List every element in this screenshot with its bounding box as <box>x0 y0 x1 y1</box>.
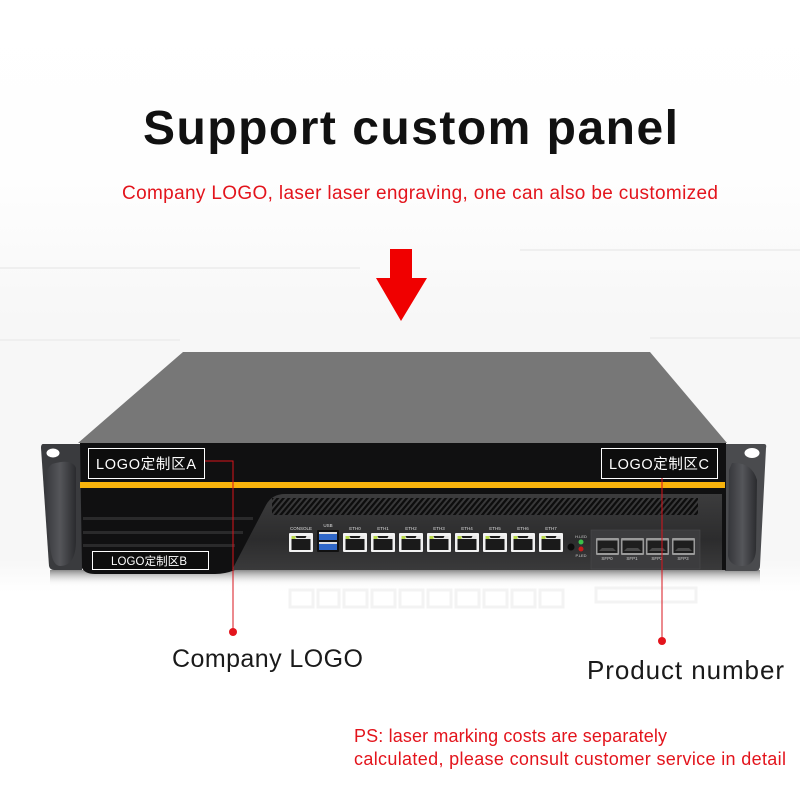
arrow: pointing down <box>376 249 427 321</box>
ventilation slots <box>272 498 698 515</box>
ethernet ports: ETH4 <box>461 526 473 531</box>
label: product number: Product number <box>587 655 784 685</box>
left rack ear <box>41 444 82 570</box>
panel grooves <box>83 517 253 547</box>
note: laser marking costs <box>354 726 786 769</box>
ethernet ports: ETH2 <box>405 526 417 531</box>
sfp cage panel: SFP1 <box>626 556 638 561</box>
server shadow <box>50 570 760 586</box>
console port: CONSOLE <box>290 526 312 531</box>
sfp cage panel: SFP2 <box>651 556 663 561</box>
server reflection <box>290 588 696 607</box>
sfp cage panel <box>591 530 700 569</box>
usb ports <box>317 523 339 552</box>
sfp cage panel: SFP3 <box>677 556 689 561</box>
label: company logo: Company LOGO <box>172 645 363 673</box>
callout line: company logo <box>205 461 237 636</box>
ethernet ports: ETH1 <box>377 526 389 531</box>
server top cover <box>78 352 727 443</box>
label box: LOGO zone B <box>92 552 208 570</box>
title: Support custom panel <box>143 102 678 155</box>
callout line: product number <box>658 478 666 645</box>
note: laser marking costs: calculated, please consult customer service in detail <box>354 749 786 769</box>
front panel <box>80 443 726 574</box>
yellow stripe <box>80 482 725 488</box>
sfp cage panel: SFP0 <box>601 556 613 561</box>
label box: LOGO zone C: LOGO定制区C <box>609 456 709 473</box>
label box: LOGO zone B: LOGO定制区B <box>111 554 187 568</box>
ethernet ports: ETH5 <box>489 526 501 531</box>
label box: LOGO zone A <box>88 448 204 478</box>
console port <box>289 526 313 552</box>
grey port bezel <box>232 494 722 570</box>
server appliance <box>41 352 766 607</box>
ethernet ports: ETH6 <box>517 526 529 531</box>
right rack ear <box>725 444 766 571</box>
label box: LOGO zone A: LOGO定制区A <box>96 456 196 473</box>
status leds: H.LED <box>575 534 587 539</box>
ethernet ports: ETH7 <box>545 526 557 531</box>
label box: LOGO zone C <box>602 448 718 478</box>
status leds <box>568 534 587 558</box>
status leds: P.LED <box>575 553 587 558</box>
ethernet ports <box>343 526 563 552</box>
usb ports: USB <box>323 523 333 528</box>
note: laser marking costs: PS: laser marking costs are separately <box>354 726 667 746</box>
subtitle: Company LOGO, laser laser engraving, one can also be customized <box>122 183 718 204</box>
ethernet ports: ETH0 <box>349 526 361 531</box>
ethernet ports: ETH3 <box>433 526 445 531</box>
